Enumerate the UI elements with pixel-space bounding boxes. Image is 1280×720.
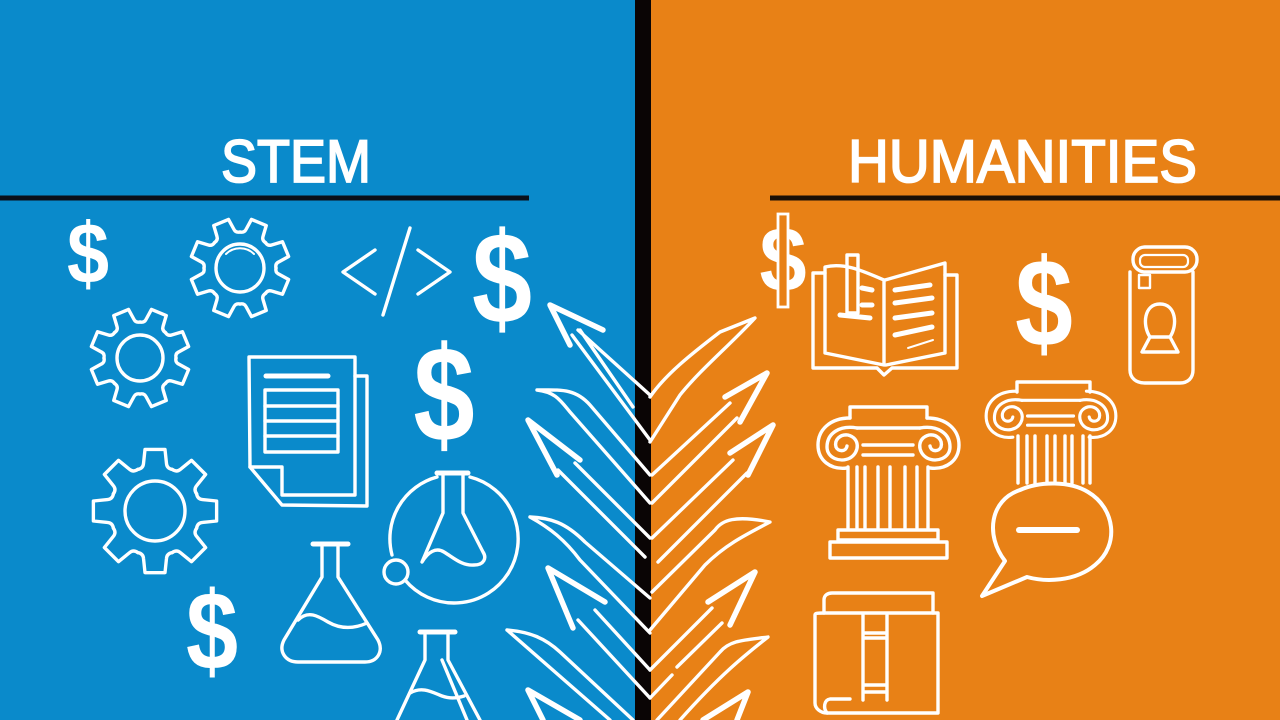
icon: dollar top right: $ [472, 206, 532, 351]
icon: gear top [176, 204, 304, 332]
icon: gear large [93, 449, 217, 573]
icon: jar with bust [1130, 247, 1197, 383]
heading: STEM [0, 128, 529, 200]
leaf L2 [537, 390, 650, 503]
icon: open book [813, 255, 957, 375]
leaf L4 [530, 517, 650, 633]
icon: gear middle [76, 294, 204, 422]
icon: flask [282, 544, 380, 662]
icon: flask in circle [384, 473, 518, 603]
heading: Humanities: HUMANITIES [848, 128, 1197, 195]
leaf R4 [650, 519, 770, 630]
panel: STEM background [0, 0, 636, 720]
arrow L1 [550, 305, 650, 440]
icon: dollar with double stem: $ [759, 208, 807, 311]
arrow L3 [528, 420, 650, 557]
arrows: right group pointing up-right [650, 318, 773, 720]
icon: column right with speech bubble [982, 382, 1116, 596]
arrow R5 [650, 572, 755, 698]
icon: flask bottom [397, 632, 480, 720]
leaf R6 [657, 637, 768, 720]
icon: dollar small top left: $ [67, 205, 109, 302]
leaf L6 [507, 630, 633, 720]
arrow R2 [652, 373, 767, 503]
icon: dollar center: $ [413, 319, 475, 471]
arrow R7 [703, 692, 748, 720]
arrows: left group pointing up-left [507, 305, 650, 720]
icon: code brackets [343, 228, 450, 315]
icon: column left [818, 407, 959, 558]
panel: Humanities background [650, 0, 1280, 720]
icon: dollar bottom: $ [186, 568, 238, 693]
heading: STEM: STEM [221, 128, 371, 195]
icon: document [249, 357, 367, 506]
arrow R3 [652, 425, 773, 562]
icon: dollar humanities: $ [1015, 234, 1073, 373]
leaf R1 [650, 318, 755, 442]
icon: closed book [815, 593, 938, 713]
heading: Humanities [770, 128, 1280, 200]
center divider [635, 0, 651, 720]
arrow L7 [528, 690, 580, 720]
arrow L5 [548, 568, 650, 698]
